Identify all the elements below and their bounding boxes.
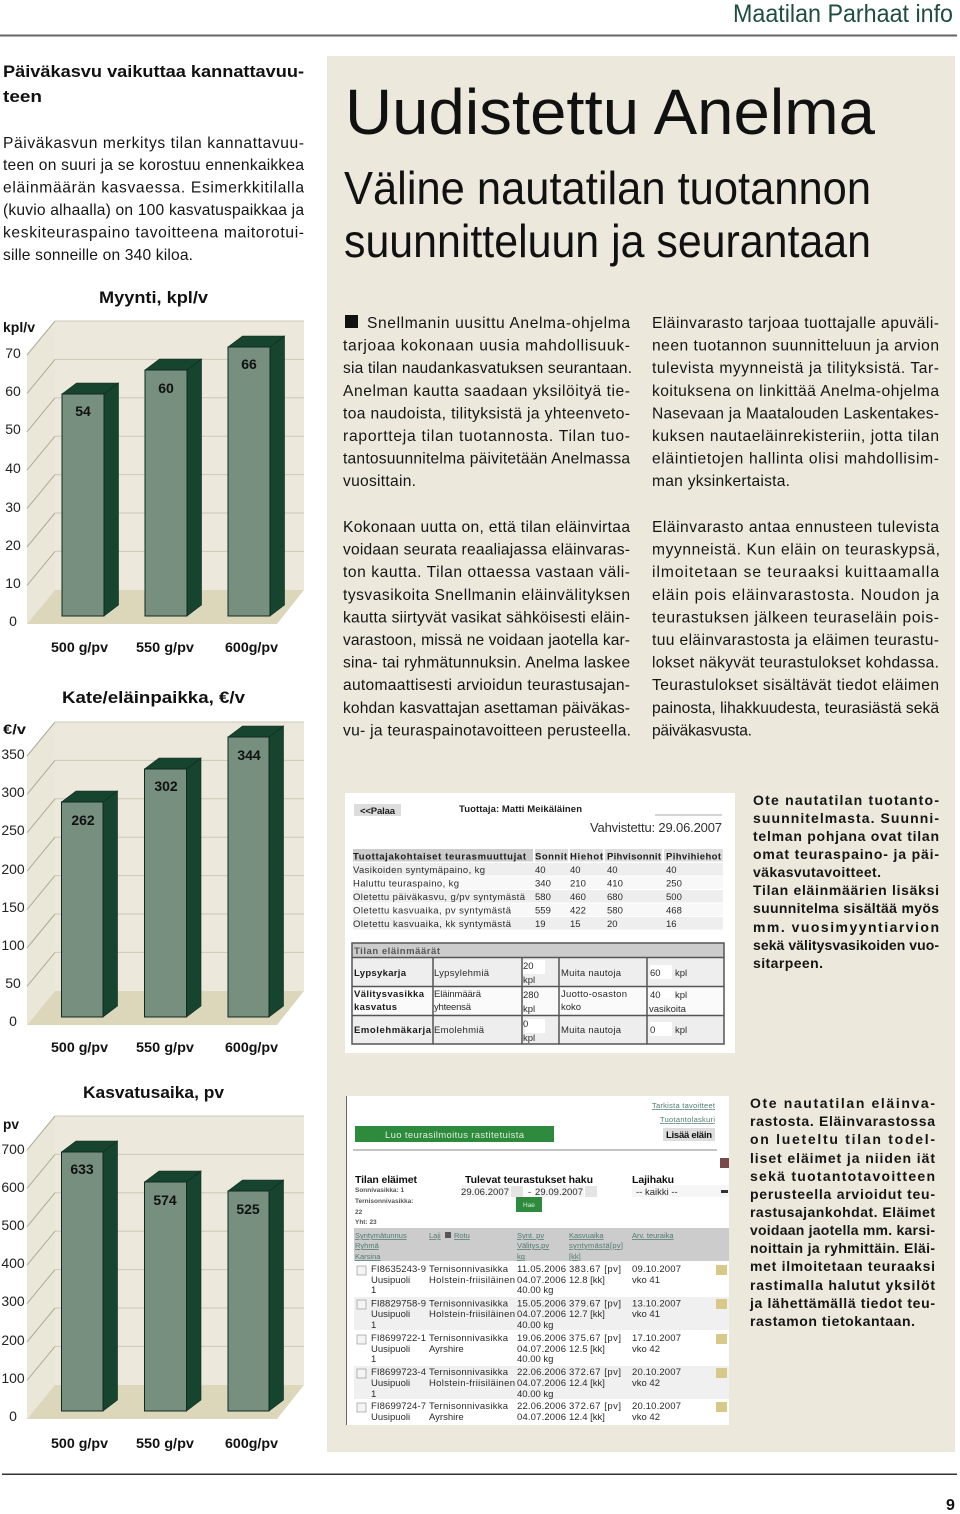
screenshot: animal inventory: FI8635243-9 [371, 1264, 426, 1275]
screenshot: animal inventory: Syntymätunnus [355, 1231, 407, 1240]
screenshot: production plan: 410 [607, 878, 623, 890]
caption: production plan: mm. vuosimyyntiarvion [753, 919, 939, 935]
chart: Kasvatusaika: 400 [1, 1255, 25, 1271]
screenshot: production plan: Tilan eläinmäärät [354, 946, 441, 957]
screenshot: animal inventory: 20.10.2007 [632, 1367, 681, 1378]
screenshot: animal inventory: 372.67 [pv] [569, 1367, 621, 1378]
caption: animal inventory: liset eläimet ja niiden iät [750, 1150, 935, 1166]
screenshot: animal inventory: Holstein-friisiläinen [429, 1275, 515, 1286]
caption: animal inventory: noittain ja ryhmittäin. Eläi- [750, 1240, 935, 1256]
screenshot: production plan: 60 [650, 968, 661, 979]
screenshot: animal inventory: Ternisonnivasikka [429, 1298, 509, 1310]
screenshot: production plan: 15 [570, 919, 581, 930]
screenshot: animal inventory: Ayrshire [429, 1412, 464, 1423]
text block: column 2 paragraph 2: Teurastulokset sisältävät tiedot eläimen [652, 677, 939, 694]
chart: Kate/eläinpaikka: 250 [1, 822, 25, 838]
text block: column 2 paragraph 1 [652, 315, 939, 490]
screenshot: production plan: 500 [666, 892, 682, 903]
chart: Myynti, kpl/v: 60 [5, 383, 21, 399]
screenshot: production plan: kpl [675, 968, 687, 979]
screenshot: animal inventory: 22 [355, 1209, 363, 1216]
screenshot: animal inventory: vko 42 [632, 1412, 660, 1423]
text block: column 2 paragraph 2: teurastuksen jälkeen teuraseläin pois- [652, 609, 939, 626]
screenshot: animal inventory: 1 [371, 1320, 376, 1331]
screenshot: production plan: kasvatus [354, 1002, 397, 1013]
screenshot: animal inventory: 12.4 [kk] [569, 1378, 605, 1389]
chart: Kate/eläinpaikka: 550 g/pv [136, 1039, 194, 1055]
text block: column 2 paragraph 1: Nasevaan ja Maatalouden Laskentakes- [652, 405, 939, 422]
chart: Kate/eläinpaikka: 150 [1, 899, 25, 915]
screenshot: production plan: kpl [675, 1025, 687, 1036]
screenshot: production plan: 40 [570, 865, 581, 876]
bar: 500 g/pv [62, 1141, 118, 1411]
screenshot: production plan: 280 [523, 990, 539, 1001]
sidebar: daily gain text: Päiväkasvu vaikuttaa kannattavuu- [3, 62, 304, 81]
bar: 550 g/pv: 60 [158, 380, 174, 396]
bar: 500 g/pv [62, 383, 118, 616]
screenshot: animal inventory: 11.05.2006 [517, 1264, 566, 1275]
chart: Myynti, kpl/v: 550 g/pv [136, 639, 194, 655]
screenshot: animal inventory: Ternisonnivasikka: [355, 1198, 413, 1205]
screenshot: animal inventory: -- kaikki -- [636, 1187, 678, 1198]
caption: production plan [753, 792, 939, 971]
text block: column 2 paragraph 1: Eläinvarasto tarjoaa tuottajalle apuväli- [652, 315, 939, 332]
screenshot: production plan: 468 [666, 906, 682, 916]
screenshot: production plan: Oletettu päiväkasvu, g/pv syntymästä [353, 892, 526, 903]
screenshot: animal inventory: 40.00 kg [517, 1285, 553, 1296]
screenshot: production plan: vasikoita [649, 1004, 687, 1015]
screenshot: animal inventory: 04.07.2006 [517, 1412, 566, 1423]
bar: 600 g/pv: 525 [236, 1201, 260, 1217]
screenshot: production plan: 40 [666, 865, 677, 876]
caption: animal inventory: rastamon tietokantaan. [750, 1313, 915, 1329]
chart: Kasvatusaika: 0 [9, 1408, 17, 1424]
text block: column 2 paragraph 1: koituksena on linkittää Anelma-ohjelma [652, 383, 939, 400]
screenshot: animal inventory: 12.7 [kk] [569, 1309, 605, 1320]
screenshot: animal inventory: Uusipuoli [371, 1344, 410, 1355]
screenshot: animal inventory: 15.05.2006 [517, 1298, 566, 1310]
title: Uudistettu Anelma [345, 76, 875, 148]
caption: animal inventory [749, 1095, 935, 1329]
screenshot: animal inventory: [kk] [569, 1252, 581, 1261]
caption: animal inventory: perusteella arvioidut teu- [750, 1186, 935, 1202]
caption: production plan: suunnitelma sisältää myös [753, 900, 939, 916]
chart: Kasvatusaika: 200 [1, 1332, 25, 1348]
bar: 550 g/pv [144, 758, 201, 1017]
screenshot: animal inventory: Uusipuoli [371, 1378, 410, 1389]
screenshot: animal inventory: syntymästä[pv] [569, 1241, 623, 1250]
chart: Myynti, kpl/v [3, 288, 304, 655]
chart: Kasvatusaika: 600g/pv [225, 1435, 278, 1451]
screenshot: animal inventory: kg [517, 1252, 525, 1261]
screenshot: production plan: Pihvisonnit [607, 852, 662, 862]
screenshot: production plan: Juotto-osaston [561, 989, 627, 1000]
sidebar: daily gain text [3, 62, 304, 264]
screenshot: production plan: Muita nautoja [561, 968, 622, 979]
chart: Myynti, kpl/v: 600g/pv [225, 639, 278, 655]
title [344, 76, 875, 267]
caption: animal inventory: on lueteltu tilan todel- [750, 1131, 935, 1147]
caption: animal inventory: rastusajankohdat. Eläimet [750, 1204, 935, 1220]
screenshot: production plan: 580 [607, 906, 623, 916]
screenshot: animal inventory: 1 [371, 1354, 376, 1365]
screenshot: animal inventory: vko 42 [632, 1378, 660, 1389]
screenshot: animal inventory: Ternisonnivasikka [429, 1367, 509, 1378]
bar: 500 g/pv: 54 [75, 403, 91, 419]
chart: Myynti, kpl/v: 20 [5, 537, 21, 553]
title: Väline nautatilan tuotannon [344, 162, 871, 214]
bar: 550 g/pv: 574 [153, 1192, 177, 1208]
caption: animal inventory: met ilmoitetaan teuraaksi [750, 1258, 935, 1274]
text block: column 1 paragraph 2: voidaan seurata reaaliajassa eläinvaras- [343, 542, 630, 559]
chart: Kate/eläinpaikka: 300 [1, 784, 25, 800]
screenshot: animal inventory: 19.06.2006 [517, 1333, 566, 1344]
screenshot: production plan: 340 [535, 878, 551, 890]
screenshot: animal inventory: vko 41 [632, 1275, 660, 1286]
screenshot: production plan: Lypsylehmiä [434, 968, 490, 979]
caption: production plan: sitarpeen. [753, 955, 823, 971]
chart: Kasvatusaika: 550 g/pv [136, 1435, 194, 1451]
bar: 600 g/pv [228, 1180, 284, 1411]
text block: column 2 paragraph 2: lokset näkyvät teurastulokset kohdassa. [652, 655, 939, 672]
chart: Kasvatusaika: 300 [1, 1293, 25, 1309]
text block: column 2 paragraph 2: ilmoitetaan se teuraaksi kuittaamalla [652, 564, 939, 581]
chart: Kate/eläinpaikka: 50 [5, 975, 21, 991]
screenshot: animal inventory: Lajihaku [632, 1174, 674, 1186]
bar: 500 g/pv: 633 [70, 1161, 94, 1177]
screenshot: animal inventory: 12.8 [kk] [569, 1275, 605, 1286]
title: suunnitteluun ja seurantaan [344, 215, 871, 267]
screenshot: animal inventory: 29.09.2007 [535, 1187, 583, 1198]
screenshot: animal inventory: 22.06.2006 [517, 1401, 566, 1412]
screenshot: animal inventory: Rotu [454, 1231, 470, 1240]
screenshot: animal inventory: FI8699722-1 [371, 1333, 426, 1344]
screenshot: animal inventory: vko 42 [632, 1344, 660, 1355]
screenshot: production plan: Sonnit [535, 852, 568, 862]
caption: animal inventory: Ote nautatilan eläinva- [750, 1095, 935, 1111]
caption: production plan: Ote nautatilan tuotanto- [753, 792, 939, 808]
screenshot: production plan: Muita nautoja [561, 1025, 622, 1036]
chart: Kasvatusaika: 600 [1, 1179, 25, 1195]
screenshot: animal inventory: Hae [523, 1202, 535, 1209]
screenshot: production plan: 0 [523, 1019, 528, 1030]
screenshot: production plan: 422 [570, 906, 586, 916]
chart: Kate/eläinpaikka [1, 688, 304, 1055]
screenshot: animal inventory: Tilan eläimet [355, 1174, 418, 1186]
text block: column 1 paragraph 2 [343, 519, 631, 739]
chart: Kate/eläinpaikka: 350 [1, 746, 25, 762]
screenshot: animal inventory: 13.10.2007 [632, 1298, 681, 1310]
screenshot: production plan: Emolehmäkarja [354, 1025, 432, 1036]
screenshot: animal inventory: Luo teurasilmoitus rastitetuista [385, 1130, 525, 1141]
sidebar: daily gain text: keskiteuraspaino tavoitteena maitorotui- [3, 224, 304, 242]
bar: 600 g/pv [228, 336, 284, 616]
bar: 600 g/pv: 344 [237, 747, 261, 763]
chart: Myynti, kpl/v: 70 [5, 345, 21, 361]
screenshot: production plan: 19 [535, 919, 546, 930]
screenshot: production plan: koko [561, 1002, 581, 1013]
screenshot: animal inventory: Tulevat teurastukset haku [465, 1174, 593, 1186]
text block: column 1 paragraph 2: varastoon, missä ne voidaan jaotella kar- [343, 632, 630, 649]
screenshot: production plan: Hiehot [570, 852, 604, 862]
screenshot: animal inventory [346, 1096, 729, 1425]
screenshot: production plan: yhteensä [434, 1002, 472, 1013]
screenshot: animal inventory: 379.67 [pv] [569, 1298, 621, 1310]
screenshot: animal inventory: Ternisonnivasikka [429, 1333, 509, 1344]
screenshot: production plan: Haluttu teuraspaino, kg [353, 878, 459, 890]
screenshot: production plan: 20 [607, 919, 618, 930]
chart: Kasvatusaika: pv [3, 1116, 19, 1132]
text block: column 1 paragraph 1: vuosittain. [343, 473, 416, 490]
screenshot: animal inventory: 04.07.2006 [517, 1309, 566, 1320]
screenshot: production plan: 20 [523, 961, 534, 972]
screenshot: production plan: Välitysvasikka [354, 989, 425, 1000]
screenshot: production plan: 250 [666, 878, 682, 890]
chart: Kasvatusaika: Kasvatusaika, pv [83, 1083, 225, 1102]
text block: column 1 paragraph 1: Anelman kautta saadaan yksilöityä tie- [343, 383, 630, 400]
panel: article background [327, 56, 955, 1452]
text block: column 1 paragraph 1: sia tilan naudankasvatuksen seurantaan. [343, 360, 632, 377]
screenshot: production plan: 40 [535, 865, 546, 876]
screenshot: animal inventory: 40.00 kg [517, 1389, 553, 1400]
caption: production plan: telman pohjana ovat tilan [753, 828, 939, 844]
screenshot: animal inventory: 40.00 kg [517, 1320, 553, 1331]
bar: 550 g/pv: 302 [154, 778, 178, 794]
chart: Kate/eläinpaikka: 500 g/pv [51, 1039, 108, 1055]
screenshot: animal inventory: Laji [429, 1231, 441, 1240]
screenshot: animal inventory: Tarkista tavoitteet [652, 1101, 716, 1110]
screenshot: animal inventory: 375.67 [pv] [569, 1333, 621, 1344]
screenshot: animal inventory: 1 [371, 1285, 376, 1296]
text block: column 1 paragraph 2: tysvasikoita Snellmanin eläinvälityksen [343, 587, 630, 604]
screenshot: production plan: Lypsykarja [354, 968, 407, 979]
screenshot: animal inventory: Uusipuoli [371, 1275, 410, 1286]
screenshot: animal inventory: Tuotantolaskuri [660, 1115, 715, 1124]
text block: column 1 paragraph 1 [343, 315, 632, 490]
text block: column 2 paragraph 2: eläin pois eläinvarastosta. Noudon ja [652, 587, 939, 604]
screenshot: animal inventory: Kasvuaika [569, 1231, 604, 1240]
screenshot: animal inventory: 20.10.2007 [632, 1401, 681, 1412]
text block: column 1 paragraph 1: tarjoaa kokonaan uusia mahdollisuuk- [343, 338, 630, 355]
screenshot: animal inventory: 04.07.2006 [517, 1378, 566, 1389]
screenshot: production plan: 460 [570, 892, 586, 903]
screenshot: production plan: 40 [650, 990, 661, 1001]
screenshot: animal inventory: 29.06.2007 [461, 1187, 509, 1198]
screenshot: production plan: Tuottaja: Matti Meikäläinen [459, 804, 582, 815]
chart: Myynti, kpl/v: 50 [5, 421, 21, 437]
chart: Kate/eläinpaikka: Kate/eläinpaikka, €/v [62, 688, 246, 707]
chart: Myynti, kpl/v: 10 [5, 575, 21, 591]
text block: column 1 paragraph 1: Snellmanin uusittu Anelma-ohjelma [367, 315, 630, 332]
sidebar: daily gain text: (kuvio alhaalla) on 100 kasvatuspaikkaa ja [3, 202, 304, 219]
screenshot: animal inventory: FI8829758-9 [371, 1298, 426, 1310]
screenshot: production plan: Eläinmäärä [434, 989, 482, 1000]
screenshot: animal inventory: Lisää eläin [666, 1130, 712, 1141]
chart: Myynti, kpl/v: 40 [5, 460, 21, 476]
caption: production plan: väkasvutavoitteet. [753, 864, 881, 880]
screenshot: production plan: 16 [666, 919, 677, 930]
screenshot: animal inventory: 372.67 [pv] [569, 1401, 621, 1412]
bar: 600 g/pv: 66 [241, 356, 257, 372]
screenshot: production plan: kpl [675, 990, 687, 1001]
screenshot: animal inventory: Karsina [355, 1252, 381, 1261]
text block: column 1 paragraph 2: ton kautta. Tilan ottaessa vastaan väli- [343, 564, 630, 581]
chart: Kasvatusaika: 500 [1, 1217, 25, 1233]
text block: column 1 paragraph 2: vu- ja teuraspainotavoitteen perusteella. [343, 722, 631, 739]
text block: column 2 paragraph 1: tulevista myynneistä ja tilityksistä. Tar- [652, 360, 939, 377]
caption: animal inventory: rastimalla halutut yksilöt [750, 1277, 935, 1293]
screenshot: animal inventory: 04.07.2006 [517, 1344, 566, 1355]
screenshot: animal inventory: Ternisonnivasikka [429, 1401, 509, 1412]
sidebar: daily gain text: sille sonneille on 340 kiloa. [3, 247, 193, 264]
screenshot: animal inventory: Holstein-friisiläinen [429, 1309, 515, 1320]
text block: column 1 paragraph 1: tantosuunnitelma päivitetään Anelmassa [343, 451, 630, 468]
chart: Kate/eläinpaikka: 600g/pv [225, 1039, 278, 1055]
screenshot: production plan: 559 [535, 906, 551, 916]
sidebar: daily gain text: Päiväkasvun merkitys tilan kannattavuu- [3, 135, 304, 152]
screenshot: animal inventory: 383.67 [pv] [569, 1264, 621, 1275]
screenshot: production plan: 580 [535, 892, 551, 903]
sidebar: daily gain text: teen on suuri ja se korostuu ennenkaikkea [3, 157, 304, 174]
bar: 600 g/pv [228, 726, 284, 1017]
screenshot: animal inventory: 1 [371, 1389, 376, 1400]
screenshot: production plan: <<Palaa [360, 806, 396, 817]
text block: column 2 paragraph 2: myynneistä. Kun eläin on teuraskypsä, [652, 542, 940, 559]
chart: Kasvatusaika: 700 [1, 1141, 25, 1157]
sidebar: daily gain text: eläinmäärän kasvaessa. Esimerkkitilalla [3, 180, 304, 196]
chart: Kasvatusaika: 500 g/pv [51, 1435, 108, 1451]
bar: 550 g/pv [144, 1171, 201, 1411]
caption: production plan: sekä välitysvasikoiden vuo- [753, 937, 939, 953]
screenshot: production plan: 40 [607, 865, 618, 876]
chart: Kate/eläinpaikka: 100 [1, 937, 25, 953]
text block: column 2 paragraph 1: eläintietojen hallinta olisi mahdollisim- [652, 451, 939, 468]
screenshot: production plan: Oletettu kasvuaika, kk syntymästä [353, 919, 512, 930]
text block: column 2 paragraph 2 [652, 519, 940, 739]
screenshot: production plan: kpl [523, 1033, 535, 1044]
bar: 500 g/pv: 262 [71, 812, 95, 828]
text block: column 2 paragraph 1: neen tuotannon suunnitteluun ja arvion [652, 338, 939, 355]
chart: Myynti, kpl/v: Myynti, kpl/v [99, 288, 209, 307]
screenshot: animal inventory: Yht: 23 [355, 1219, 377, 1226]
screenshot: animal inventory: Uusipuoli [371, 1412, 410, 1423]
caption: production plan: suunnitelmasta. Suunni- [753, 810, 939, 826]
screenshot: production plan: Oletettu kasvuaika, pv syntymästä [353, 906, 512, 916]
screenshot: production plan: Emolehmiä [434, 1025, 485, 1036]
caption: animal inventory: sekä tuotantotavoitteen [750, 1168, 935, 1184]
screenshot: animal inventory: 09.10.2007 [632, 1264, 681, 1275]
screenshot: animal inventory: Sonnivasikka: 1 [355, 1187, 405, 1194]
chart: Kasvatusaika [1, 1083, 304, 1451]
screenshot: production plan: Tuottajakohtaiset teurasmuuttujat [353, 852, 527, 862]
chart: Kate/eläinpaikka: 200 [1, 861, 25, 877]
screenshot: production plan: kpl [523, 975, 535, 986]
text block: column 1 paragraph 2: Kokonaan uutta on, että tilan eläinvirtaa [343, 519, 630, 536]
bar: 500 g/pv [62, 791, 118, 1017]
screenshot: production plan: Vahvistettu: 29.06.2007 [590, 820, 722, 835]
caption: production plan: omat teuraspaino- ja päi- [753, 846, 939, 862]
screenshot: animal inventory: Uusipuoli [371, 1309, 410, 1320]
text block: column 1 paragraph 2: kohdan kasvattajan asettaman päiväkas- [343, 700, 630, 717]
text block: column 2 paragraph 1: kuksen nautaeläinrekisteriin, jotta tilan [652, 428, 939, 445]
screenshot: production plan: kpl [523, 1004, 535, 1015]
chart: Myynti, kpl/v: 30 [5, 499, 21, 515]
footer rule and page number: 9 [946, 1497, 955, 1514]
screenshot: animal inventory: Ternisonnivasikka [429, 1264, 509, 1275]
caption: animal inventory: ja lähettämällä tiedot teu- [749, 1295, 935, 1311]
text block: column 1 paragraph 2: automaattisesti arvioidun teurastusajan- [343, 677, 630, 694]
chart: Myynti, kpl/v: 500 g/pv [51, 639, 108, 655]
screenshot: animal inventory: Holstein-friisiläinen [429, 1378, 515, 1389]
screenshot: animal inventory: Arv. teuraika [632, 1231, 674, 1240]
text block: column 1 paragraph 2: sina- tai ryhmätunnuksin. Anelma laskee [343, 655, 630, 672]
caption: production plan: Tilan eläinmäärien lisäksi [753, 882, 939, 898]
screenshot: production plan: Pihvihiehot [666, 852, 722, 862]
sidebar: daily gain text: teen [3, 87, 42, 106]
text block: column 1 paragraph 2: kautta siirtyvät vasikat sähköisesti eläin- [343, 609, 630, 626]
text block: column 2 paragraph 2: tuu eläinvarastosta ja eläimen teurastu- [652, 632, 939, 649]
screenshot: animal inventory: Välitys.pv [517, 1241, 549, 1250]
text block: column 2 paragraph 2: päiväkasvusta. [652, 722, 752, 739]
screenshot: animal inventory: Synt. pv [517, 1231, 544, 1240]
screenshot: production plan: 0 [650, 1025, 655, 1036]
screenshot: animal inventory: Ayrshire [429, 1344, 464, 1355]
text block: column 1 paragraph 1: toa naudoista, tilityksistä ja yhteenveto- [343, 405, 630, 422]
caption: animal inventory: rastosta. Eläinvarastossa [750, 1113, 935, 1129]
chart: Kate/eläinpaikka: €/v [3, 721, 26, 737]
bar: 550 g/pv [145, 359, 202, 616]
text block: column 1 paragraph 1: raportteja tilan tuotannosta. Tilan tuo- [343, 428, 630, 445]
text block: column 2 paragraph 1: man yksinkertaista. [652, 473, 790, 490]
screenshot: production plan [345, 793, 735, 1053]
screenshot: animal inventory: 12.5 [kk] [569, 1344, 605, 1355]
screenshot: animal inventory: vko 41 [632, 1309, 660, 1320]
screenshot: animal inventory: FI8699724-7 [371, 1401, 426, 1412]
chart: Kate/eläinpaikka: 0 [9, 1013, 17, 1029]
screenshot: animal inventory: 40.00 kg [517, 1354, 553, 1365]
screenshot: animal inventory: FI8699723-4 [371, 1367, 426, 1378]
screenshot: production plan: 680 [607, 892, 623, 903]
screenshot: animal inventory: 04.07.2006 [517, 1275, 566, 1286]
screenshot: animal inventory: 22.06.2006 [517, 1367, 566, 1378]
caption: animal inventory: voidaan jaotella mm. karsi- [750, 1222, 935, 1238]
chart: Kasvatusaika: 100 [1, 1370, 25, 1386]
screenshot: animal inventory: Ryhmä [355, 1241, 380, 1250]
screenshot: production plan: 210 [570, 878, 586, 890]
screenshot: animal inventory: 17.10.2007 [632, 1333, 681, 1344]
text block: column 2 paragraph 2: Eläinvarasto antaa ennusteen tulevista [652, 519, 939, 536]
screenshot: animal inventory: 12.4 [kk] [569, 1412, 605, 1423]
screenshot: animal inventory: - [528, 1187, 531, 1198]
screenshot: production plan: Vasikoiden syntymäpaino, kg [353, 865, 485, 876]
chart: Myynti, kpl/v: kpl/v [3, 319, 35, 335]
text block: column 2 paragraph 2: painosta, lihakkuudesta, teurasiästä sekä [652, 700, 939, 717]
chart: Myynti, kpl/v: 0 [9, 613, 17, 629]
